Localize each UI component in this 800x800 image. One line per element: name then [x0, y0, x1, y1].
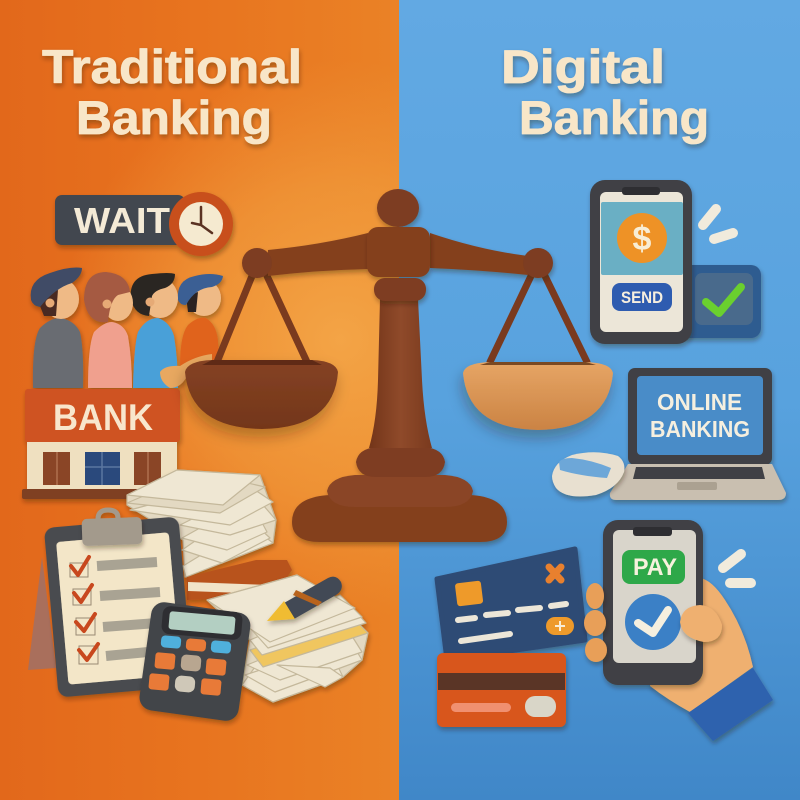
person 2: [84, 272, 133, 388]
laptop screen text: ONLINE: [657, 389, 742, 415]
fingers and thumb: [584, 583, 722, 662]
title: Traditional Banking: Banking: [76, 91, 272, 144]
person 3: [131, 273, 178, 388]
icon: green check tile: [680, 265, 761, 338]
laptop screen text: BANKING: [650, 416, 750, 442]
balance scale: [185, 189, 613, 542]
clip: [82, 510, 142, 546]
title: Digital Banking: Banking: [519, 91, 709, 144]
sleeve: [688, 668, 773, 741]
clipboard board: [44, 516, 193, 698]
calculator: [138, 601, 252, 722]
send button: [612, 283, 672, 311]
title: Digital Banking: [501, 40, 709, 144]
icon: mouse: [552, 452, 624, 496]
base: [292, 447, 507, 542]
card chip: [455, 580, 483, 606]
checklist rows: [70, 557, 160, 664]
bank sign: BANK: [53, 397, 153, 438]
title: Digital Banking: Digital: [501, 40, 665, 93]
title: Traditional Banking: [42, 40, 302, 144]
calculator display: [161, 606, 243, 640]
motion ticks: top phone: [703, 209, 733, 239]
person 1: [31, 268, 83, 388]
icon: dollar coin: $: [633, 220, 652, 258]
book: [187, 560, 292, 600]
bank windows: [43, 452, 161, 485]
centre knob: [367, 189, 430, 301]
people queue: [31, 268, 223, 388]
background: digital side: [399, 0, 800, 800]
right hanging strings: [490, 276, 587, 362]
card plus pill: [546, 617, 574, 635]
icon: clock: [169, 192, 233, 256]
paper stack: centre: [127, 470, 276, 577]
hand holding phone: [650, 578, 773, 741]
send button: SEND: [621, 288, 663, 307]
wait sign: WAIT: [74, 200, 170, 241]
background: traditional side: [0, 0, 399, 800]
title: Traditional Banking: Traditional: [42, 40, 302, 93]
bank building: [22, 389, 180, 499]
wait sign: [55, 192, 233, 256]
icon: pen: [267, 577, 342, 621]
bottom phone: pay: [603, 520, 703, 685]
credit card: navy: [437, 549, 585, 660]
clipboard stand: [28, 557, 56, 670]
right bowl: [463, 362, 613, 430]
motion ticks: bottom phone: [723, 554, 751, 583]
laptop: online banking: [610, 368, 786, 500]
column: [369, 299, 432, 448]
person 4: [178, 274, 223, 366]
beam: [242, 233, 553, 278]
card number dashes: [458, 604, 566, 641]
icon: check circle: [625, 594, 681, 650]
person 4 arm and hand: [160, 354, 212, 388]
laptop base: [610, 464, 786, 500]
icon: dollar coin: [617, 213, 667, 263]
left hanging strings: [217, 276, 307, 362]
left bowl: [185, 360, 338, 429]
clipboard checklist: [28, 510, 193, 698]
top phone: send: [590, 180, 692, 344]
laptop screen text: [650, 389, 750, 442]
paper stack: right: [207, 575, 368, 702]
credit card: orange: [437, 653, 566, 727]
card x mark: [549, 567, 561, 580]
pay button: PAY: [633, 554, 677, 581]
calculator keys: [148, 635, 231, 696]
bank sign: [25, 389, 180, 442]
pay button: [622, 550, 685, 584]
